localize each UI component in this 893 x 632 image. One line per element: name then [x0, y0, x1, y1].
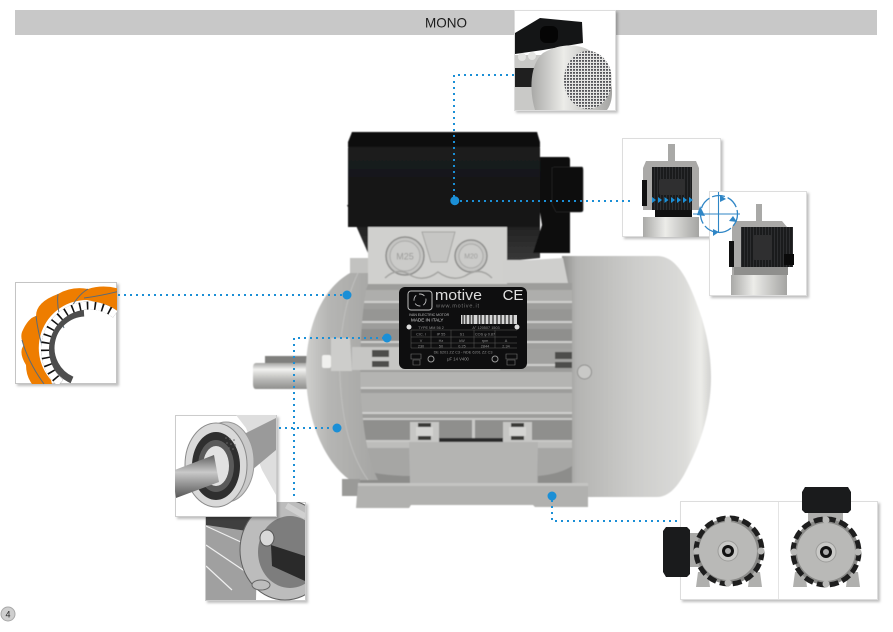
marker arrows across terminal box: [652, 197, 693, 203]
nameplate data table: V: [420, 339, 423, 343]
nameplate barcode: [461, 315, 517, 324]
motor: black terminal box: [348, 132, 540, 227]
nameplate data table: A° 120507 1503: [472, 326, 500, 330]
nameplate data table: S1: [460, 332, 464, 336]
thumbnail: front views: [663, 487, 878, 600]
thumbnail: terminal box position A: [622, 138, 720, 237]
motor: cable gland: [552, 167, 583, 212]
thumbnail: flange and shaft: [205, 502, 310, 604]
motor: finned body: [358, 283, 572, 483]
nameplate data table: IP 55: [437, 332, 445, 336]
page number badge: 4: [5, 610, 11, 620]
page number badge: [1, 607, 15, 621]
motor: terminal box wedge: [347, 205, 540, 262]
motor: foot centre block: [409, 442, 538, 483]
motor: shaft: [253, 356, 308, 389]
nameplate data table: 0,25: [458, 344, 466, 348]
callout: flange leader: [294, 338, 384, 500]
thumbnail: stator winding: [16, 282, 120, 386]
winding: orange coil: [21, 286, 120, 386]
front view: side terminal box: [663, 516, 764, 587]
nameplate data table: kW: [459, 339, 465, 343]
nameplate data table: 2844: [481, 344, 489, 348]
thumbnail: rear fan view: [514, 10, 616, 110]
motor: connector housing: [533, 157, 570, 253]
motor: small terminal lug: [502, 258, 568, 283]
nameplate logo: [408, 291, 432, 310]
motor: foot base: [342, 479, 360, 496]
nameplate data table: 50: [439, 344, 443, 348]
nameplate data table: rpm: [482, 339, 488, 343]
nameplate data table: μF 14 V400: [447, 356, 470, 362]
motor: foot clamps: [410, 422, 532, 442]
title: MONO: [425, 14, 467, 30]
nameplate data table: A: [505, 339, 508, 343]
nameplate brand: motive: [435, 287, 482, 304]
callout lines: [118, 75, 680, 521]
CE mark: CE: [503, 287, 523, 304]
nameplate data table: TYPE MM 56 2: [418, 326, 444, 330]
nameplate: IVAN ELECTRIC MOTOR: [409, 313, 450, 317]
nameplate data table: CIC. I: [416, 332, 426, 336]
icon: rotation arrows: [693, 192, 740, 236]
nameplate: [399, 287, 527, 369]
motor: top lug: [350, 258, 370, 276]
callout: rear view leader: [454, 75, 514, 201]
nameplate data table: DE 6201 ZZ C3 - NDE 6201 ZZ C3: [434, 350, 492, 354]
header bar: [15, 10, 877, 35]
thumbnail: terminal box position B: [710, 192, 806, 296]
nameplate data table: COS φ 0.87: [475, 332, 495, 336]
callout: foot leader: [552, 500, 680, 521]
callout: bearing leader: [279, 427, 334, 429]
thumbnail: bearing: [172, 415, 276, 516]
motor: fan cover: [562, 256, 711, 497]
marker dots: [332, 196, 556, 500]
motor: terminal base: [368, 226, 507, 284]
callout: terminal box leader: [460, 200, 632, 202]
motor: terminal base: M25: [396, 252, 414, 262]
winding: dark core: [51, 313, 84, 380]
motor: tie-rod lug: [322, 338, 572, 371]
callout: stator leader: [118, 294, 345, 296]
nameplate: MADE IN ITALY: [411, 318, 444, 322]
winding: slots: [45, 306, 115, 383]
motor: side pin: [578, 365, 592, 379]
front view: top terminal box: [790, 487, 862, 588]
nameplate data table: 230: [418, 344, 424, 348]
nameplate data table: Hz: [439, 339, 443, 343]
nameplate data table: 2,34: [502, 344, 510, 348]
nameplate: www.motive.it: [435, 304, 479, 310]
motor: terminal base: M20: [464, 254, 478, 260]
motor: front end shield: [306, 273, 378, 480]
main motor illustration: [253, 132, 711, 508]
nameplate data table: [411, 326, 517, 362]
